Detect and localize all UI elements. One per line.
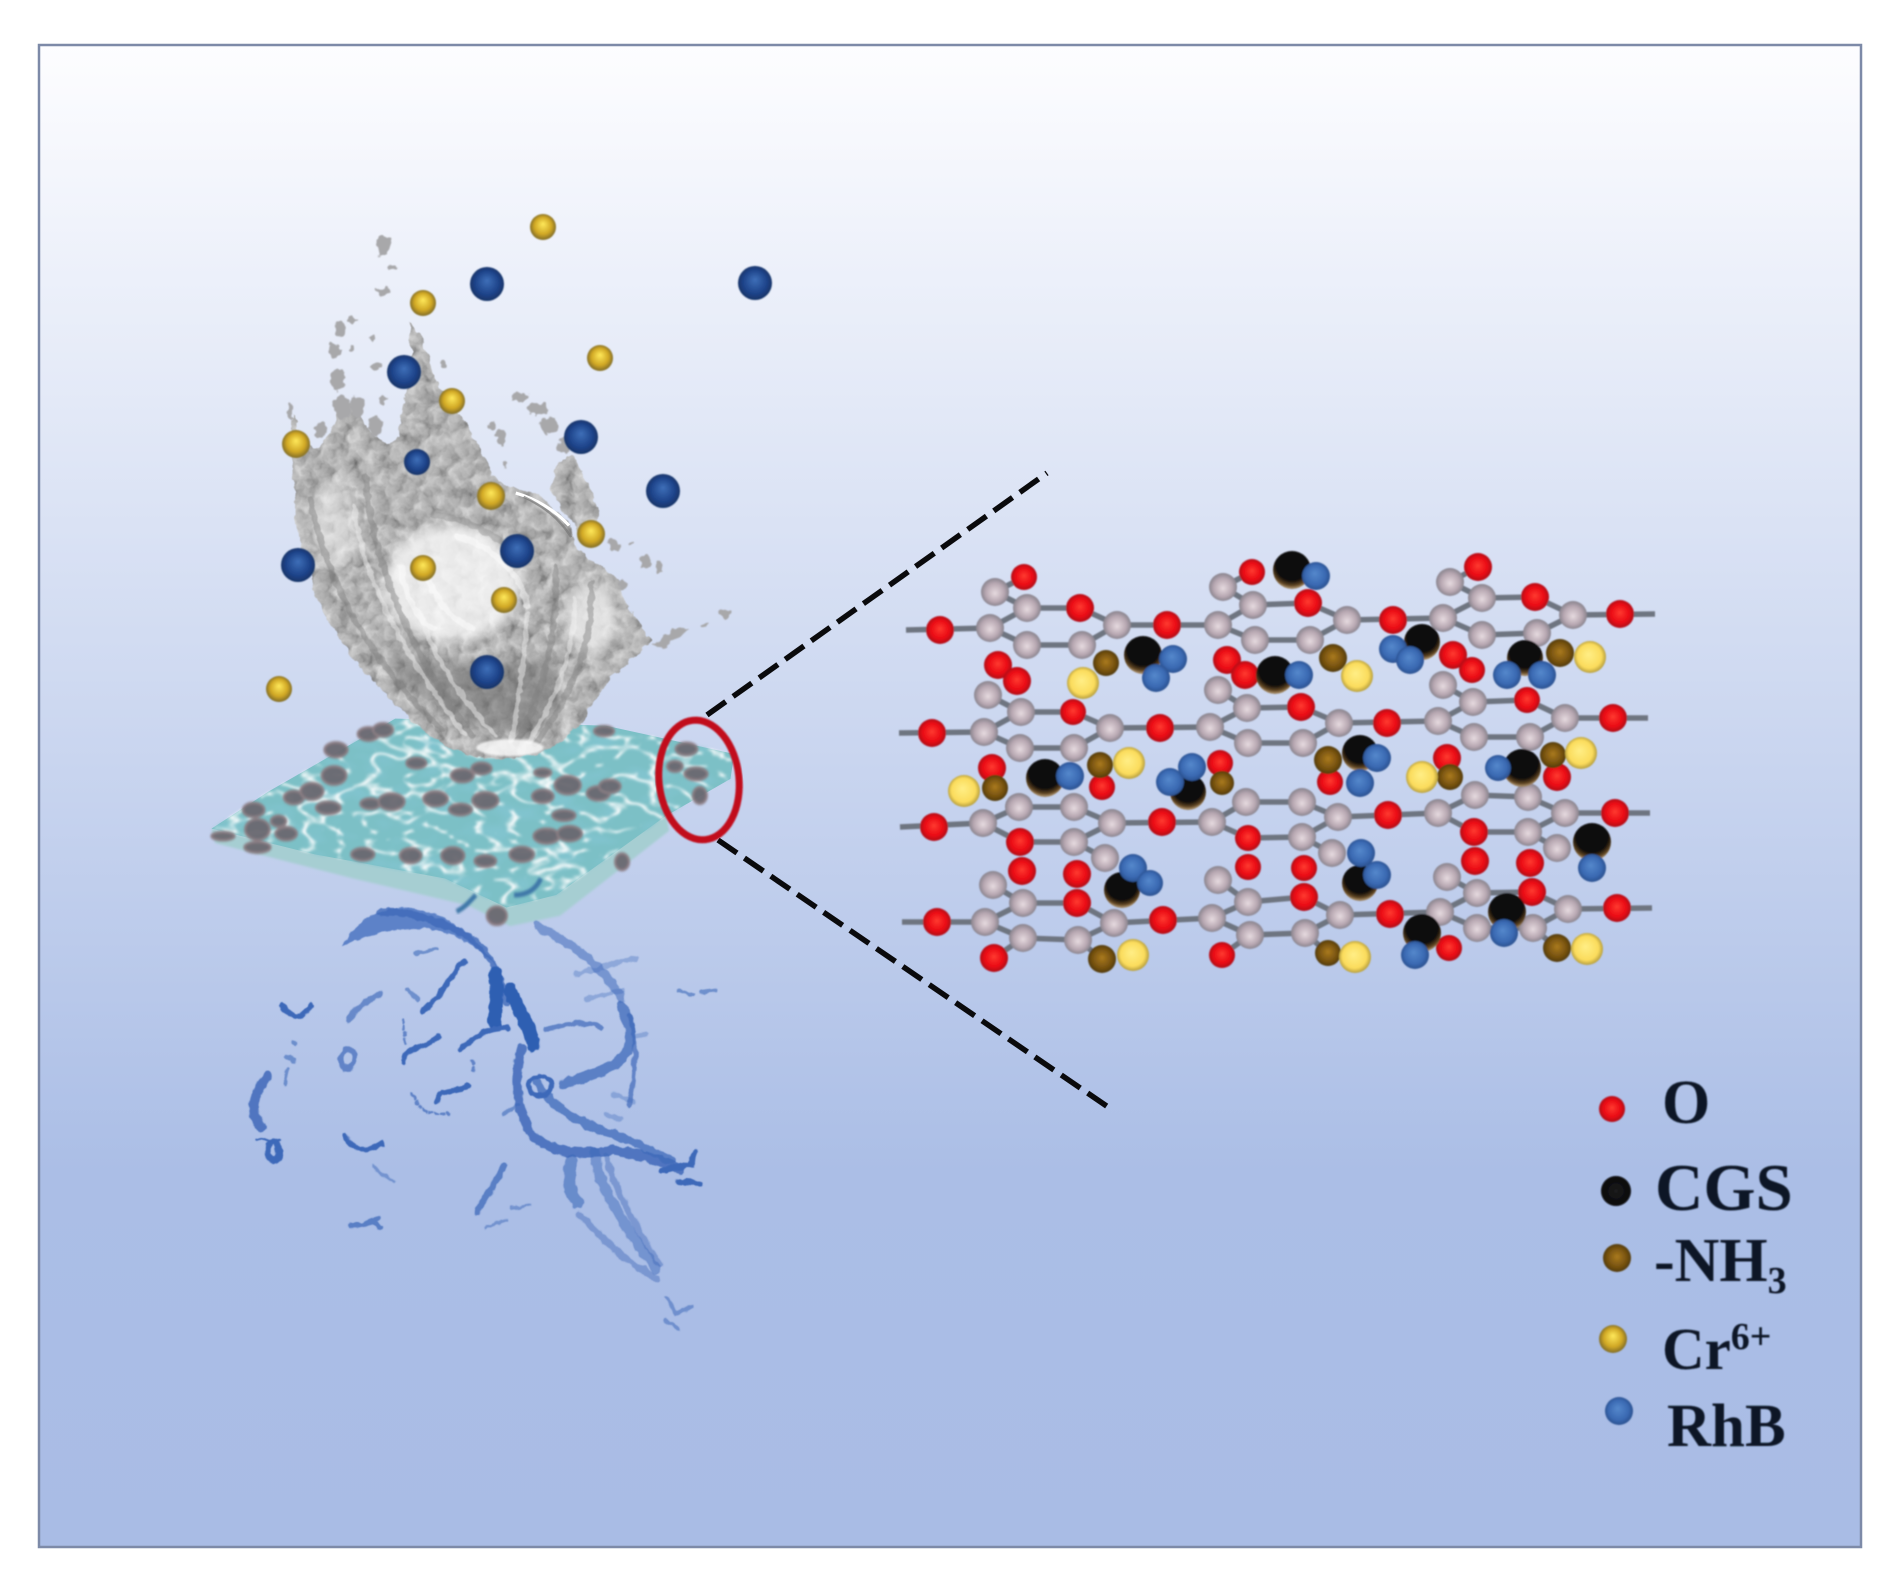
main arc ribbon <box>342 908 499 970</box>
legend: -NH3 <box>1603 1227 1787 1302</box>
molecular structure <box>899 551 1655 973</box>
Cr6+ ions <box>266 214 613 702</box>
flow shading inside the splash <box>310 476 614 744</box>
red ellipse highlight <box>653 716 745 844</box>
dark lower band <box>385 648 556 734</box>
membrane sheet with adsorbed particles <box>211 719 734 926</box>
legend: RhB: RhB <box>1667 1393 1786 1460</box>
adsorbed NH3, Cr6+, CGS and RhB clusters <box>948 551 1611 973</box>
crest rim <box>516 493 569 526</box>
legend: CGS: CGS <box>1655 1151 1793 1225</box>
grey contaminated water splash <box>287 235 730 759</box>
upper dashed line <box>707 473 1047 715</box>
bright left highlight <box>310 483 358 568</box>
membrane side edge <box>211 812 669 926</box>
oxygen atoms <box>918 553 1634 972</box>
bottom reflection <box>476 739 543 756</box>
legend: O <box>1599 1069 1710 1137</box>
flow streaks <box>310 476 591 744</box>
spray droplets <box>287 235 730 646</box>
lattice bonds <box>899 567 1655 959</box>
legend: -NH3: 3 <box>1768 1260 1787 1302</box>
adsorbed grey particles <box>211 723 707 925</box>
blue flow entering membrane <box>457 878 541 912</box>
right highlight <box>567 583 614 652</box>
water caustic pattern <box>211 719 734 908</box>
blue filtered water splash <box>254 908 715 1329</box>
legend: Cr6+: Cr <box>1662 1316 1731 1382</box>
splash body <box>292 323 650 759</box>
main arc <box>380 912 506 1003</box>
free Cr6+ and RhB ions <box>266 214 772 702</box>
legend <box>1599 1069 1793 1460</box>
zoom lines <box>707 473 1108 1107</box>
legend: Cr6+ <box>1599 1316 1771 1382</box>
legend: Cr6+: 6+ <box>1731 1316 1771 1358</box>
bright centre <box>385 526 520 640</box>
legend: -NH3: -NH <box>1654 1227 1768 1295</box>
membrane top surface <box>211 719 734 908</box>
legend: RhB <box>1605 1393 1786 1460</box>
legend: O: O <box>1662 1069 1710 1137</box>
RhB ions <box>281 266 772 689</box>
lower dashed line <box>718 840 1108 1107</box>
water highlights <box>211 719 734 908</box>
carbon atoms <box>969 568 1587 954</box>
